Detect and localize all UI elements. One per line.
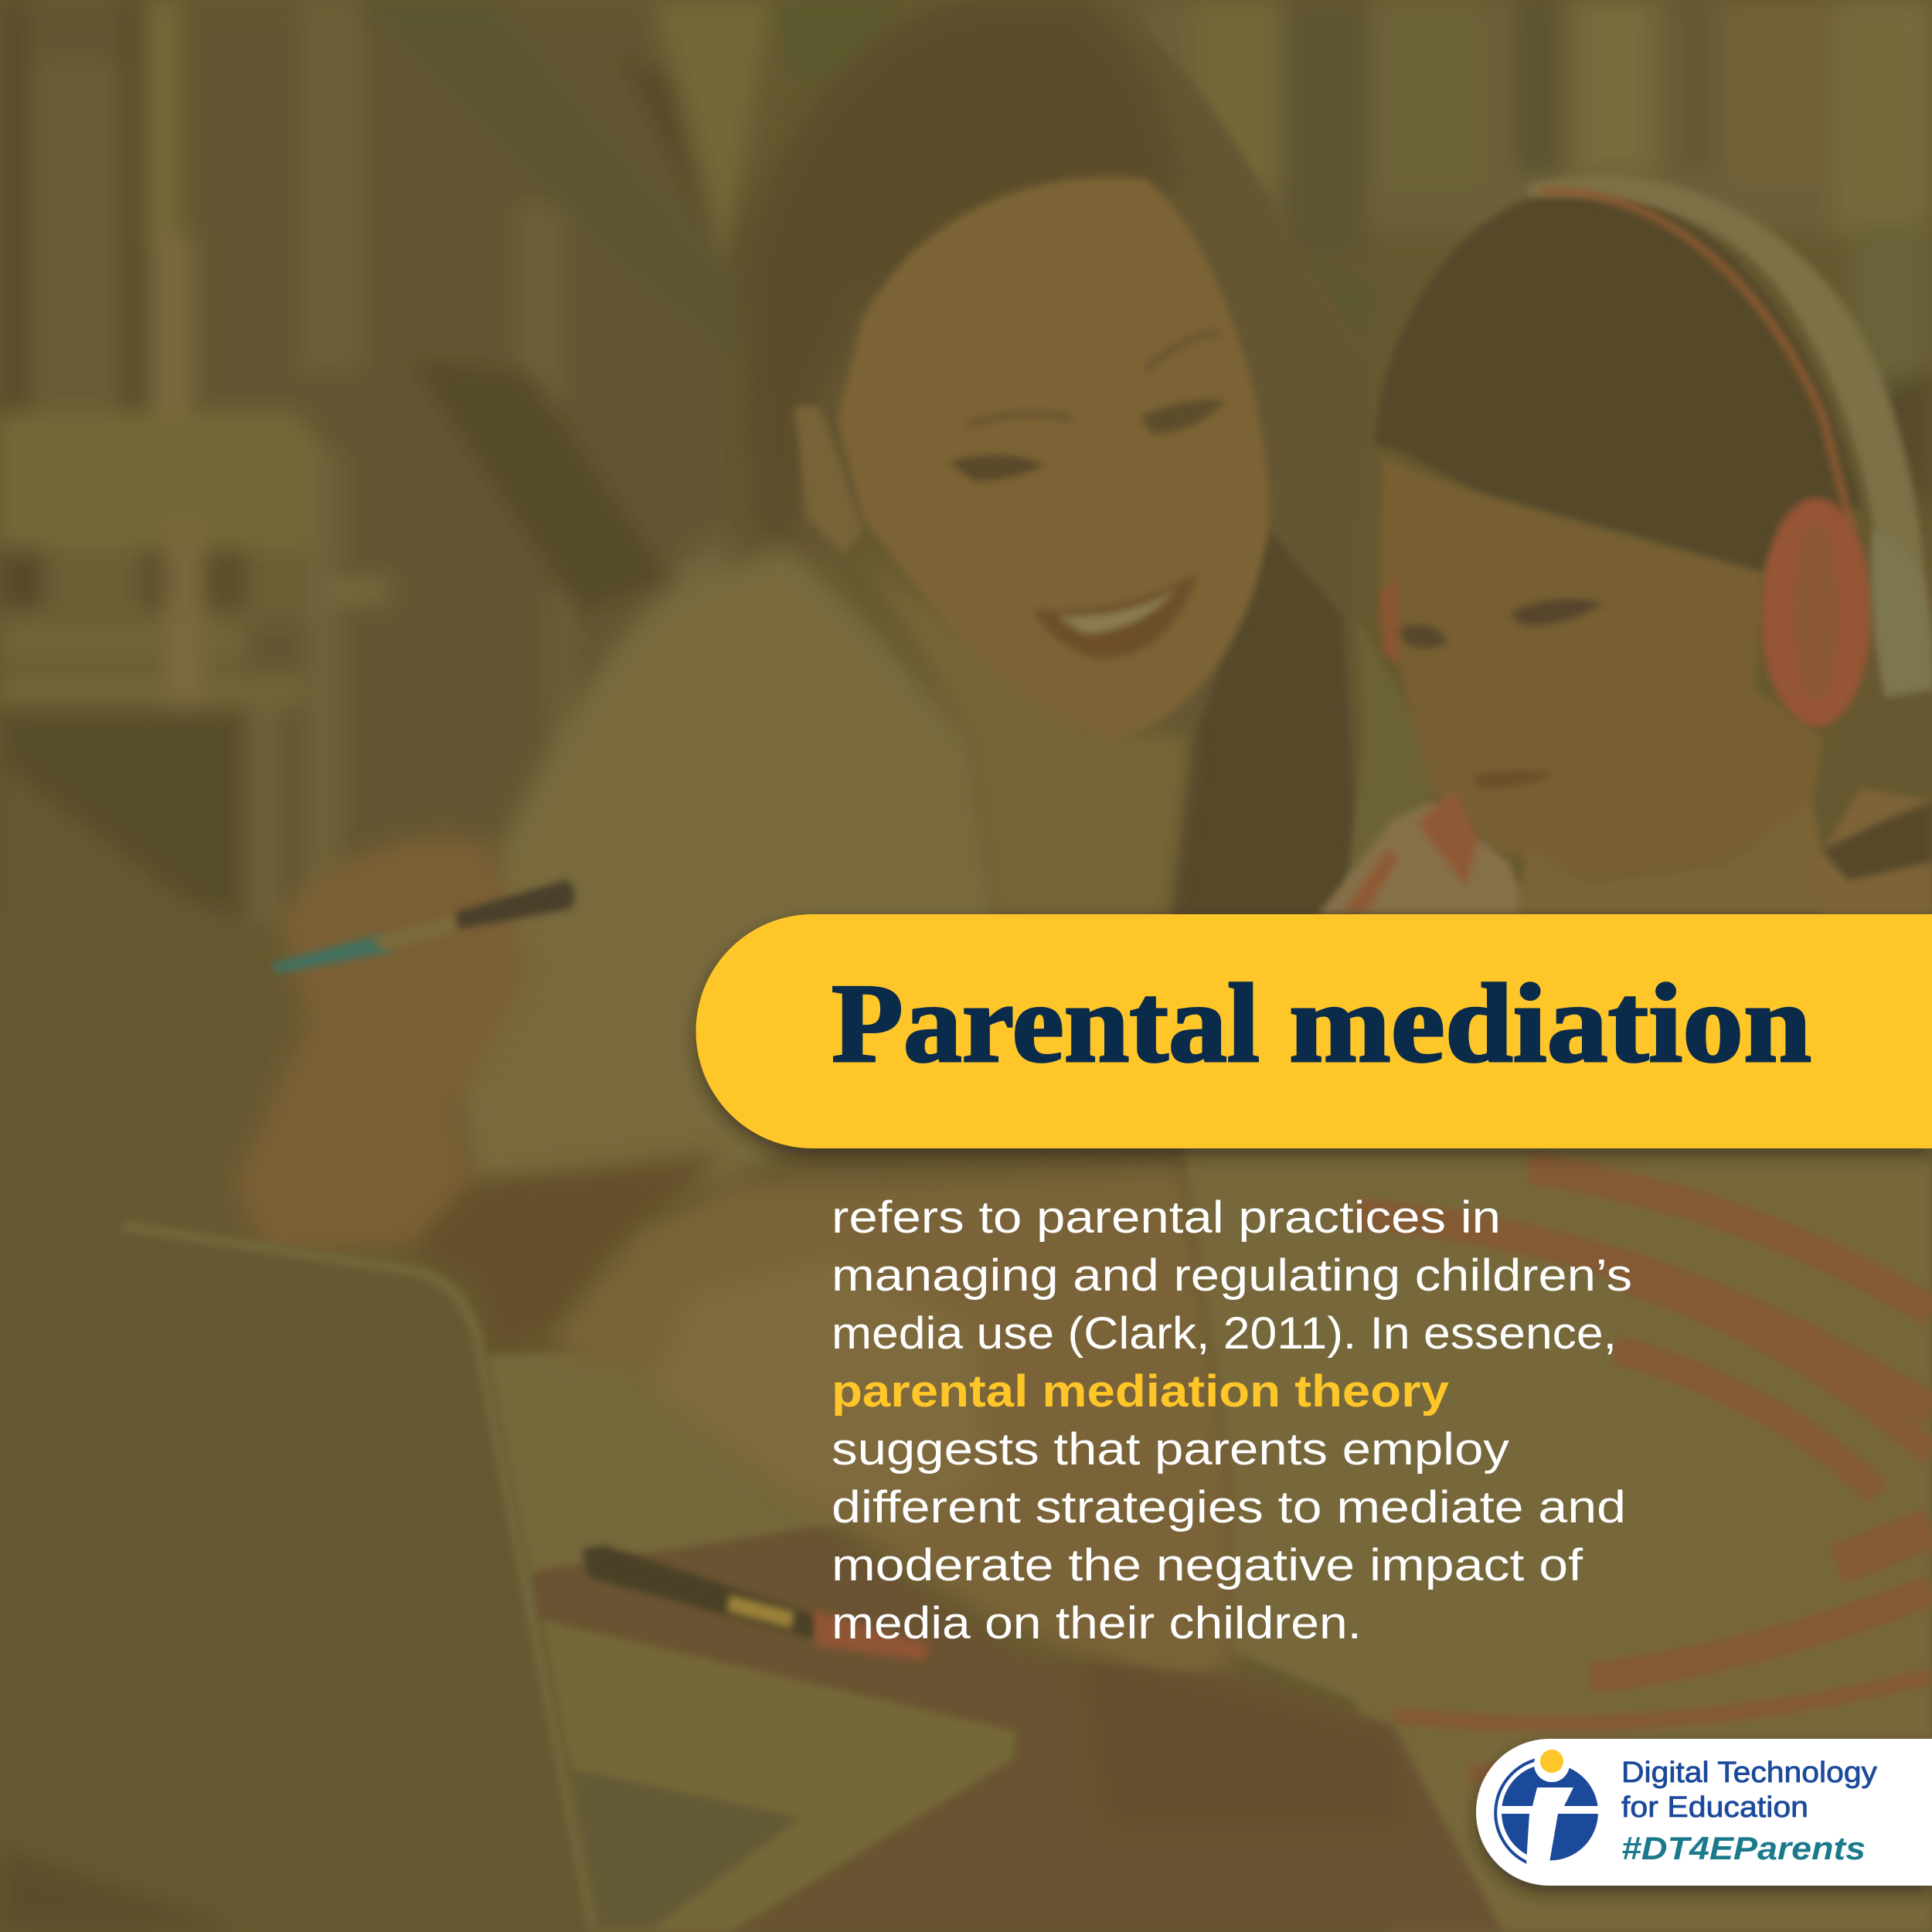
woman neck and chest bbox=[862, 554, 1189, 918]
table bbox=[532, 1528, 1503, 1932]
body text: media use (Clark, 2011). In essence, bbox=[832, 1308, 1617, 1359]
child face bbox=[1380, 456, 1824, 881]
gap between woman and child bbox=[1343, 616, 1441, 912]
table pen yellow band bbox=[727, 1594, 794, 1629]
child collar and shirt bbox=[1318, 788, 1932, 918]
icon: DT4E logo bbox=[1495, 1747, 1600, 1862]
child eyes and mouth bbox=[1380, 579, 1604, 789]
title bbox=[832, 961, 1811, 1086]
woman eyes, brows and smile bbox=[949, 332, 1226, 659]
table shadow bbox=[1084, 1657, 1405, 1824]
body text: suggests that parents employ bbox=[832, 1424, 1509, 1475]
logo text: #DT4EParents bbox=[1621, 1830, 1866, 1866]
body text bbox=[832, 1192, 1632, 1648]
laptop bottom edge shadow bbox=[0, 1849, 247, 1932]
child hair bbox=[1374, 189, 1861, 573]
lower hands and paper bbox=[487, 1171, 1232, 1694]
title: Parental bbox=[832, 961, 1260, 1086]
body text: managing and regulating children’s bbox=[832, 1250, 1632, 1301]
sleeve shadow under arm bbox=[413, 1152, 727, 1355]
highlighted phrase: parental mediation theory bbox=[832, 1366, 1449, 1417]
woman ear bbox=[794, 406, 862, 554]
body text: refers to parental practices in bbox=[832, 1192, 1501, 1243]
logo text: for Education bbox=[1621, 1791, 1808, 1824]
body text: different strategies to mediate and bbox=[832, 1482, 1626, 1532]
title banner bbox=[696, 914, 1932, 1148]
table pen bbox=[582, 1545, 819, 1639]
table pen tip bbox=[813, 1609, 930, 1661]
woman blouse and arm bbox=[456, 549, 998, 1183]
woman face bbox=[838, 177, 1269, 740]
woman hand with pen bbox=[234, 835, 575, 1257]
logo text: Digital Technology bbox=[1621, 1757, 1877, 1789]
title: mediation bbox=[1289, 961, 1811, 1086]
logo badge bbox=[1476, 1739, 1932, 1886]
striped shirt bbox=[1183, 1140, 1932, 1932]
foreground person at left bbox=[0, 764, 308, 1257]
laptop lid bbox=[0, 1208, 597, 1932]
logo text bbox=[1621, 1757, 1877, 1866]
background room: wall, shelves, plant and curtains bbox=[0, 0, 1932, 937]
body text: media on their children. bbox=[832, 1598, 1362, 1648]
woman hair bbox=[740, 0, 1374, 918]
child headphones bbox=[1528, 175, 1932, 727]
laptop keyboard deck bbox=[543, 1621, 1016, 1932]
laptop keys bbox=[570, 1768, 801, 1928]
body text: moderate the negative impact of bbox=[832, 1540, 1583, 1590]
